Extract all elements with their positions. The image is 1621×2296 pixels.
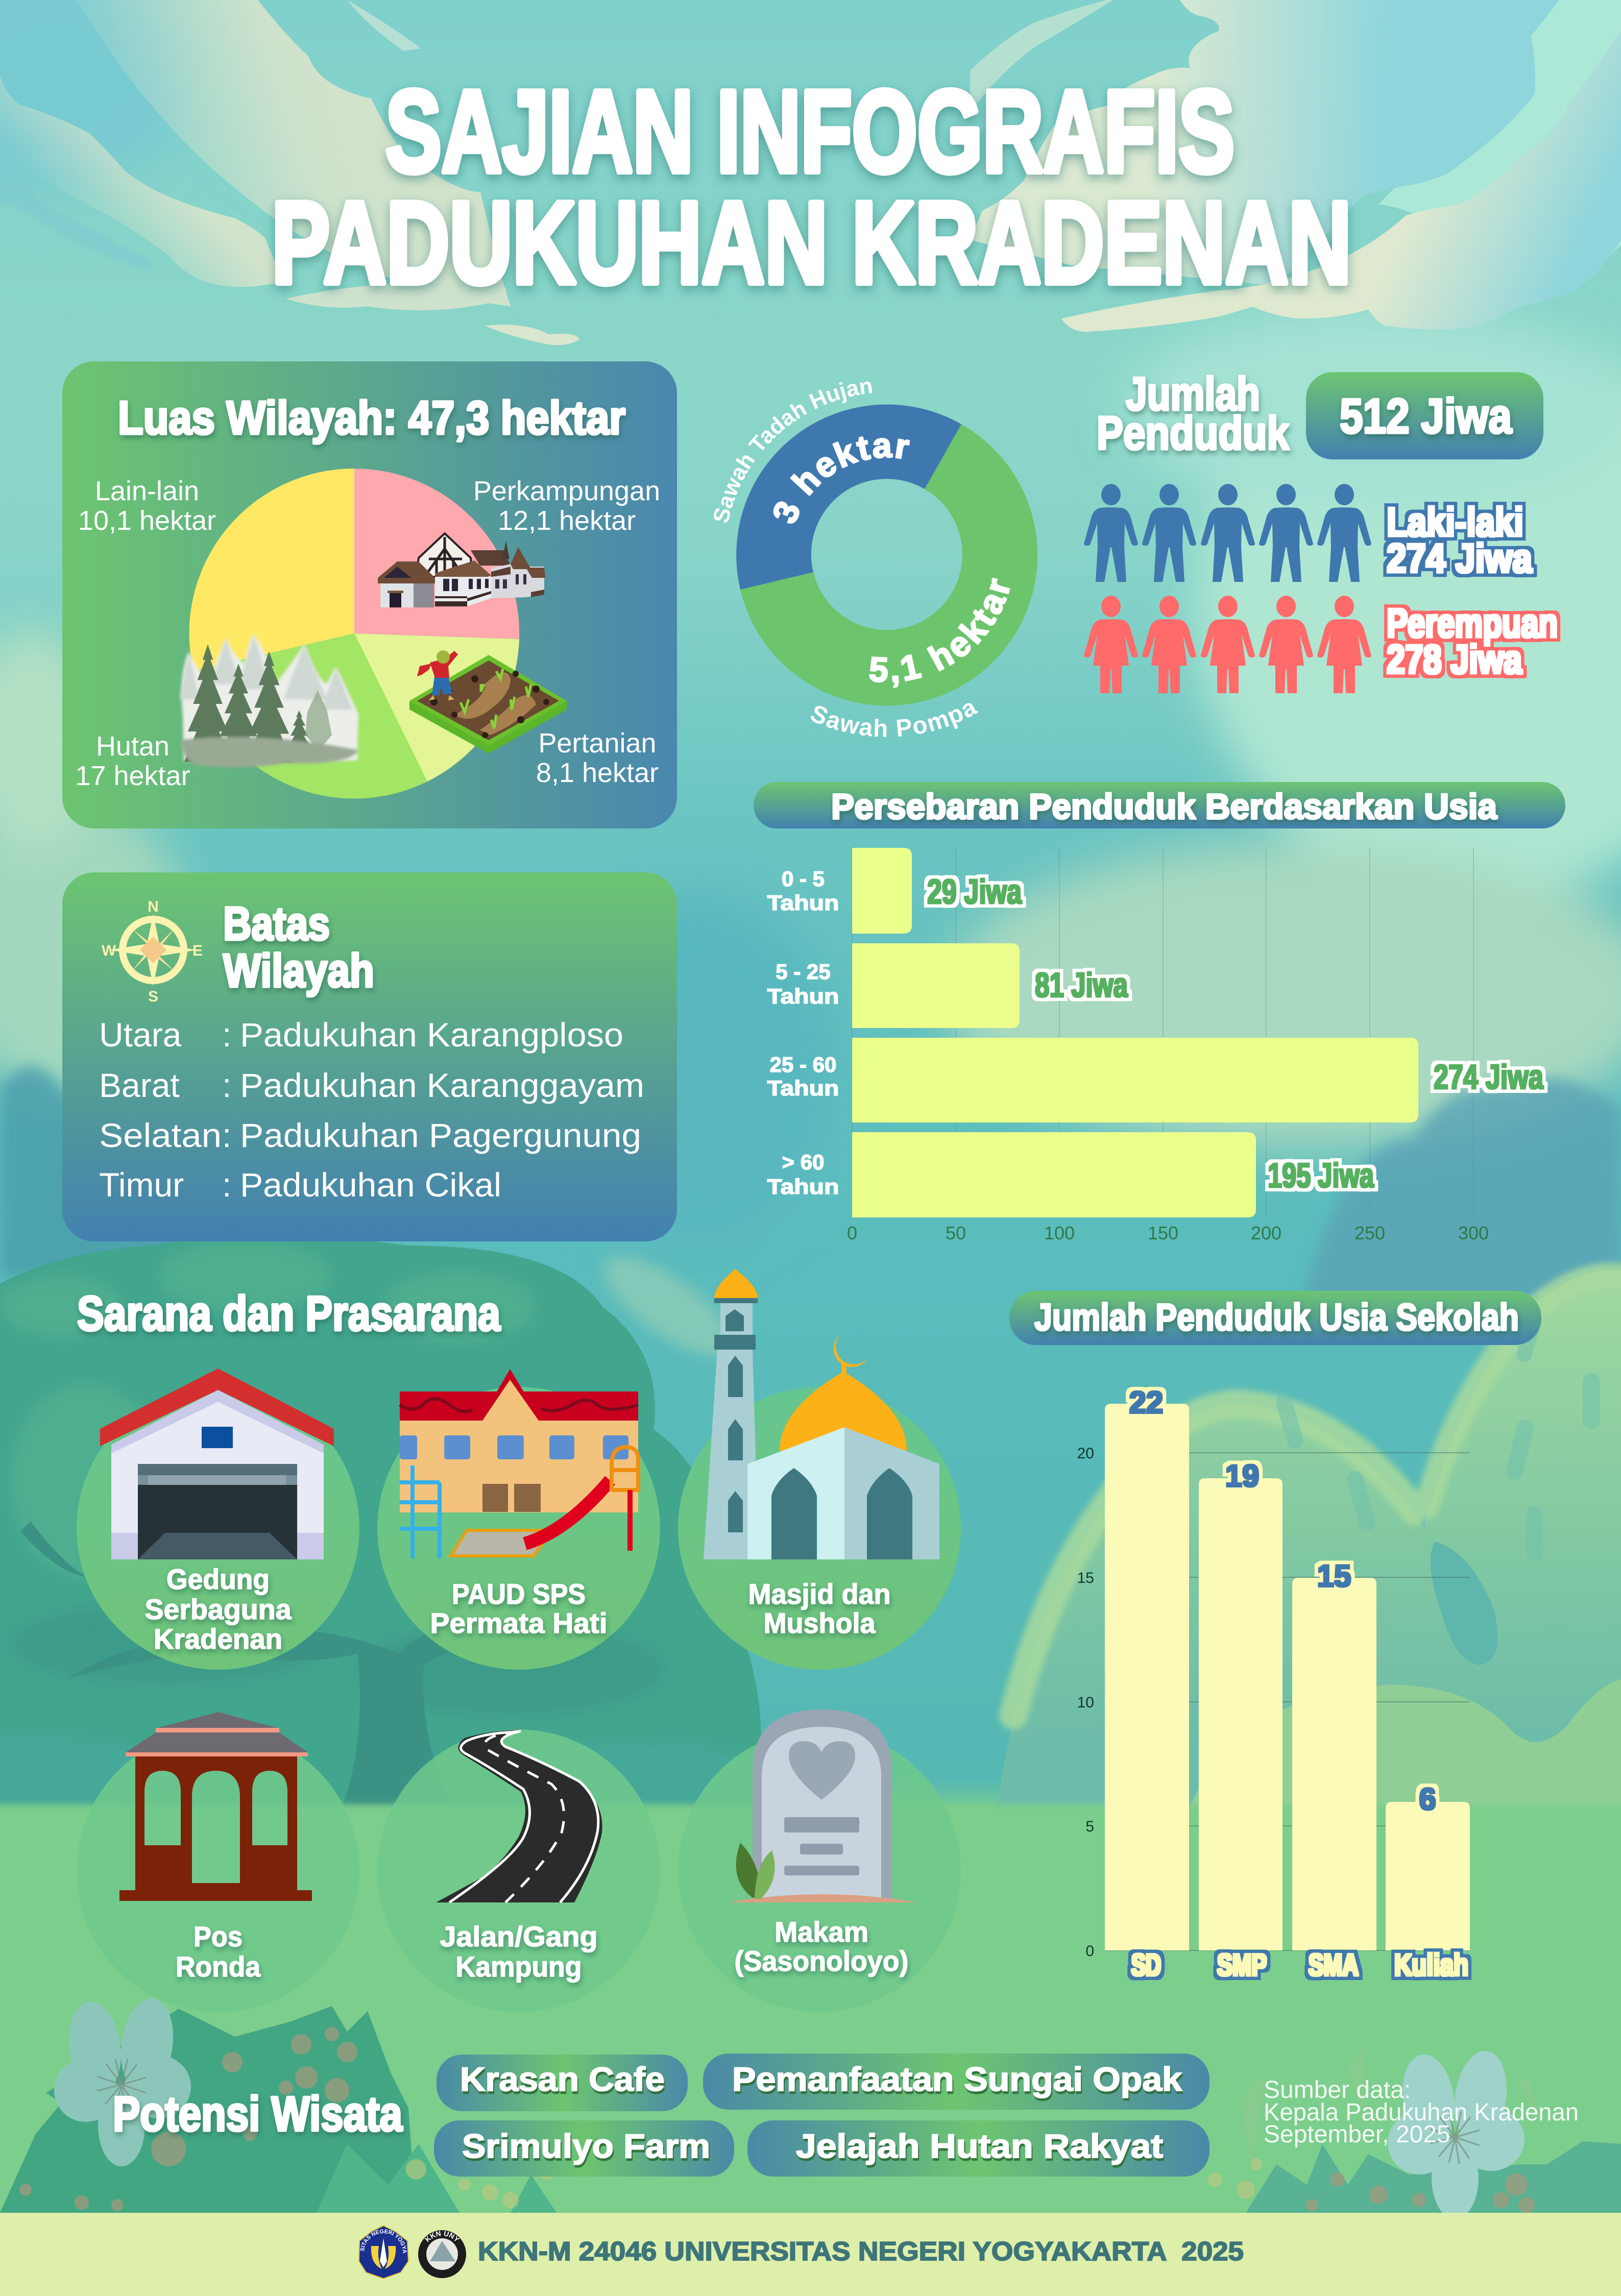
icon: compass: E [192, 942, 203, 959]
axis labels: 0 [847, 1223, 857, 1243]
label: Mushola [764, 1607, 876, 1639]
value labels [927, 872, 1544, 1195]
axis labels: 150 [1148, 1223, 1178, 1243]
source note: Sumber data: [1264, 2077, 1411, 2104]
large tree [0, 1235, 771, 1822]
axis labels: 50 [946, 1223, 966, 1243]
bar chart: age distribution [767, 848, 1544, 1243]
axis labels [847, 1223, 1489, 1243]
boundary list: Padukuhan Pagergunung [240, 1116, 641, 1154]
distant bushes [0, 1067, 1621, 1337]
label: Pos [193, 1920, 243, 1952]
boundary list: : [222, 1016, 231, 1054]
icon: road [436, 1730, 602, 1902]
pie label: pertanian: Pertanian [538, 728, 657, 759]
boundary list: Selatan [99, 1116, 222, 1154]
axis labels: 20 [1077, 1445, 1094, 1462]
pie label: lain-lain: 10,1 hektar [78, 505, 216, 536]
panel: batas wilayah [62, 872, 677, 1241]
boundary list: Padukuhan Cikal [240, 1166, 501, 1204]
label: Jalan/Gang [440, 1920, 597, 1952]
source note [1264, 2077, 1579, 2148]
icon: misty forest [180, 634, 359, 767]
tourism pills [434, 2054, 1209, 2177]
category labels [1131, 1948, 1468, 1982]
value labels [1129, 1385, 1436, 1816]
donut label: sawah tadah hujan: Sawah Tadah Hujan [708, 373, 874, 525]
pie label: perkampungan: Perkampungan [473, 476, 660, 506]
pie label: hutan: Hutan [96, 731, 170, 762]
age category labels: Tahun [767, 1076, 839, 1100]
label: Permata Hati [430, 1607, 608, 1639]
age category labels: Tahun [767, 984, 839, 1008]
heading: batas wilayah: Wilayah [223, 945, 374, 997]
donut chart: sawah [708, 373, 1037, 743]
label: Kradenan [154, 1623, 282, 1655]
label: (Sasonoloyo) [734, 1945, 909, 1977]
axis labels: 10 [1077, 1694, 1094, 1711]
donut label: 3 hektar: 3 hektar [773, 436, 910, 524]
icon: hall building [100, 1369, 334, 1559]
label: Makam [775, 1916, 868, 1948]
axis labels [1077, 1445, 1094, 1960]
source note: Kepala Padukuhan Kradenan [1264, 2099, 1579, 2126]
axis labels: 200 [1251, 1223, 1281, 1243]
value labels: 81 Jiwa [1035, 966, 1128, 1005]
label: Serbaguna [145, 1593, 292, 1625]
title [272, 67, 1351, 308]
pill heading: persebaran usia: Persebaran Penduduk Berdasarkan Usia [831, 787, 1497, 826]
age category labels: 5 - 25 [776, 960, 831, 984]
clouds left [0, 0, 579, 345]
category labels: SMP [1217, 1948, 1267, 1982]
label [145, 1563, 292, 1655]
pale streak behind tree [590, 1240, 747, 1374]
heading: jumlah penduduk [1097, 368, 1290, 459]
boundary list: Barat [99, 1066, 180, 1104]
facility: pos ronda [77, 1712, 359, 2012]
pill heading: usia sekolah [1009, 1291, 1541, 1345]
facility: gedung serbaguna [77, 1369, 359, 1670]
age category labels: 25 - 60 [770, 1053, 836, 1077]
sky washes [0, 0, 1621, 1251]
heading: jumlah penduduk: Jumlah [1126, 368, 1260, 420]
value labels: 29 Jiwa [927, 872, 1022, 911]
total population badge [1306, 372, 1543, 459]
boundary list: : [222, 1116, 231, 1154]
heading: jumlah penduduk: Penduduk [1097, 407, 1290, 459]
axis labels: 15 [1077, 1570, 1094, 1586]
foliage [0, 2006, 1621, 2213]
value labels: 6 [1419, 1782, 1436, 1816]
logo: kkn emblem [418, 2229, 466, 2278]
icon: school playground [400, 1369, 638, 1558]
label: Kampung [455, 1950, 582, 1983]
bar chart: school age [1077, 1385, 1470, 1982]
pill heading: usia sekolah: Jumlah Penduduk Usia Sekolah [1034, 1296, 1519, 1338]
category labels: SD [1131, 1948, 1161, 1982]
icon: compass: W [102, 942, 116, 959]
label [430, 1578, 608, 1639]
icon: farm plot [409, 650, 567, 753]
heading: batas wilayah: Batas [223, 898, 330, 950]
age category labels [767, 867, 839, 1199]
value labels: 274 Jiwa [1434, 1058, 1544, 1096]
meadow [0, 1804, 1621, 2296]
axis labels: 300 [1458, 1223, 1489, 1243]
icon: mosque [704, 1269, 939, 1559]
donut label: sawah pompa: Sawah Pompa [807, 693, 982, 743]
category labels: Kuliah [1394, 1948, 1468, 1982]
category labels: SMA [1309, 1948, 1359, 1982]
clouds right [970, 0, 1621, 332]
icon: compass [102, 898, 203, 1005]
label [440, 1920, 597, 1983]
pie label: perkampungan: 12,1 hektar [498, 505, 636, 536]
tourism pills: Krasan Cafe [460, 2060, 665, 2098]
boundary list: : [222, 1066, 231, 1104]
title: SAJIAN INFOGRAFIS [385, 67, 1235, 197]
value labels: 15 [1317, 1559, 1351, 1593]
boundary list: Padukuhan Karanggayam [240, 1066, 644, 1104]
facility: masjid [678, 1269, 961, 1670]
facility: jalan [377, 1729, 660, 2012]
footer text: KKN-M 24046 UNIVERSITAS NEGERI YOGYAKARTA 2025 [478, 2237, 1244, 2266]
label [734, 1916, 909, 1977]
pie chart: land use [189, 469, 519, 798]
icon: village house [378, 533, 545, 607]
label: female count: Perempuan [1387, 600, 1558, 646]
label: female count [1387, 600, 1558, 682]
label: male count: Laki-laki [1387, 499, 1523, 545]
label: female count: 278 Jiwa [1387, 637, 1522, 682]
logo: university emblem: UNIVERSITAS NEGERI YOGYAKARTA [0, 0, 407, 2254]
label: Ronda [176, 1950, 261, 1983]
pie label: pertanian: 8,1 hektar [536, 758, 659, 788]
icons: female figures [1084, 596, 1371, 693]
heading: potensi wisata: Potensi Wisata [113, 2087, 403, 2141]
heading: luas wilayah: Luas Wilayah: 47,3 hektar [118, 392, 625, 444]
age category labels: 0 - 5 [782, 867, 825, 891]
boundary list [99, 1016, 644, 1204]
facility: makam [678, 1709, 961, 2012]
boundary list: Padukuhan Karangploso [240, 1016, 623, 1054]
facility: paud [377, 1369, 660, 1670]
pie label: lain-lain: Lain-lain [95, 476, 199, 506]
label: male count: 274 Jiwa [1387, 535, 1532, 581]
label: male count [1387, 499, 1532, 581]
label: Masjid dan [748, 1578, 890, 1610]
label [176, 1920, 261, 1983]
logo: kkn emblem: KKN UNY [423, 2229, 462, 2244]
axis labels: 5 [1085, 1818, 1094, 1835]
pie label: hutan: 17 hektar [75, 761, 190, 791]
value labels: 195 Jiwa [1268, 1156, 1374, 1195]
axis labels: 250 [1354, 1223, 1385, 1243]
heading: sarana dan prasarana: Sarana dan Prasarana [77, 1286, 501, 1341]
icon: compass: N [148, 898, 159, 915]
donut label: 5,1 hektar: 5,1 hektar [869, 578, 1010, 688]
boundary list: : [222, 1166, 231, 1204]
label [748, 1578, 890, 1639]
boundary list: Timur [99, 1166, 184, 1204]
axis labels: 0 [1085, 1943, 1094, 1960]
value labels: 19 [1225, 1459, 1259, 1493]
value labels: 22 [1129, 1385, 1163, 1420]
icon: gravestone [727, 1709, 917, 1902]
panel: luas wilayah [62, 361, 677, 828]
source note: September, 2025 [1264, 2121, 1450, 2148]
tourism pills: Jelajah Hutan Rakyat [796, 2127, 1163, 2165]
age category labels: > 60 [782, 1150, 824, 1174]
boundary list: Utara [99, 1016, 182, 1054]
hills [990, 1271, 1621, 1838]
age category labels: Tahun [767, 1175, 839, 1199]
heading: batas wilayah [223, 898, 374, 997]
axis labels: 100 [1044, 1223, 1075, 1243]
tourism pills: Pemanfaatan Sungai Opak [732, 2060, 1182, 2098]
icons: male figures [1084, 484, 1371, 582]
icon: compass: S [148, 988, 158, 1005]
total population badge: 512 Jiwa [1340, 389, 1512, 444]
label: Gedung [166, 1563, 270, 1595]
tourism pills: Srimulyo Farm [462, 2127, 710, 2165]
age category labels: Tahun [767, 891, 839, 915]
icon: gazebo [119, 1712, 312, 1901]
label: PAUD SPS [452, 1578, 586, 1610]
